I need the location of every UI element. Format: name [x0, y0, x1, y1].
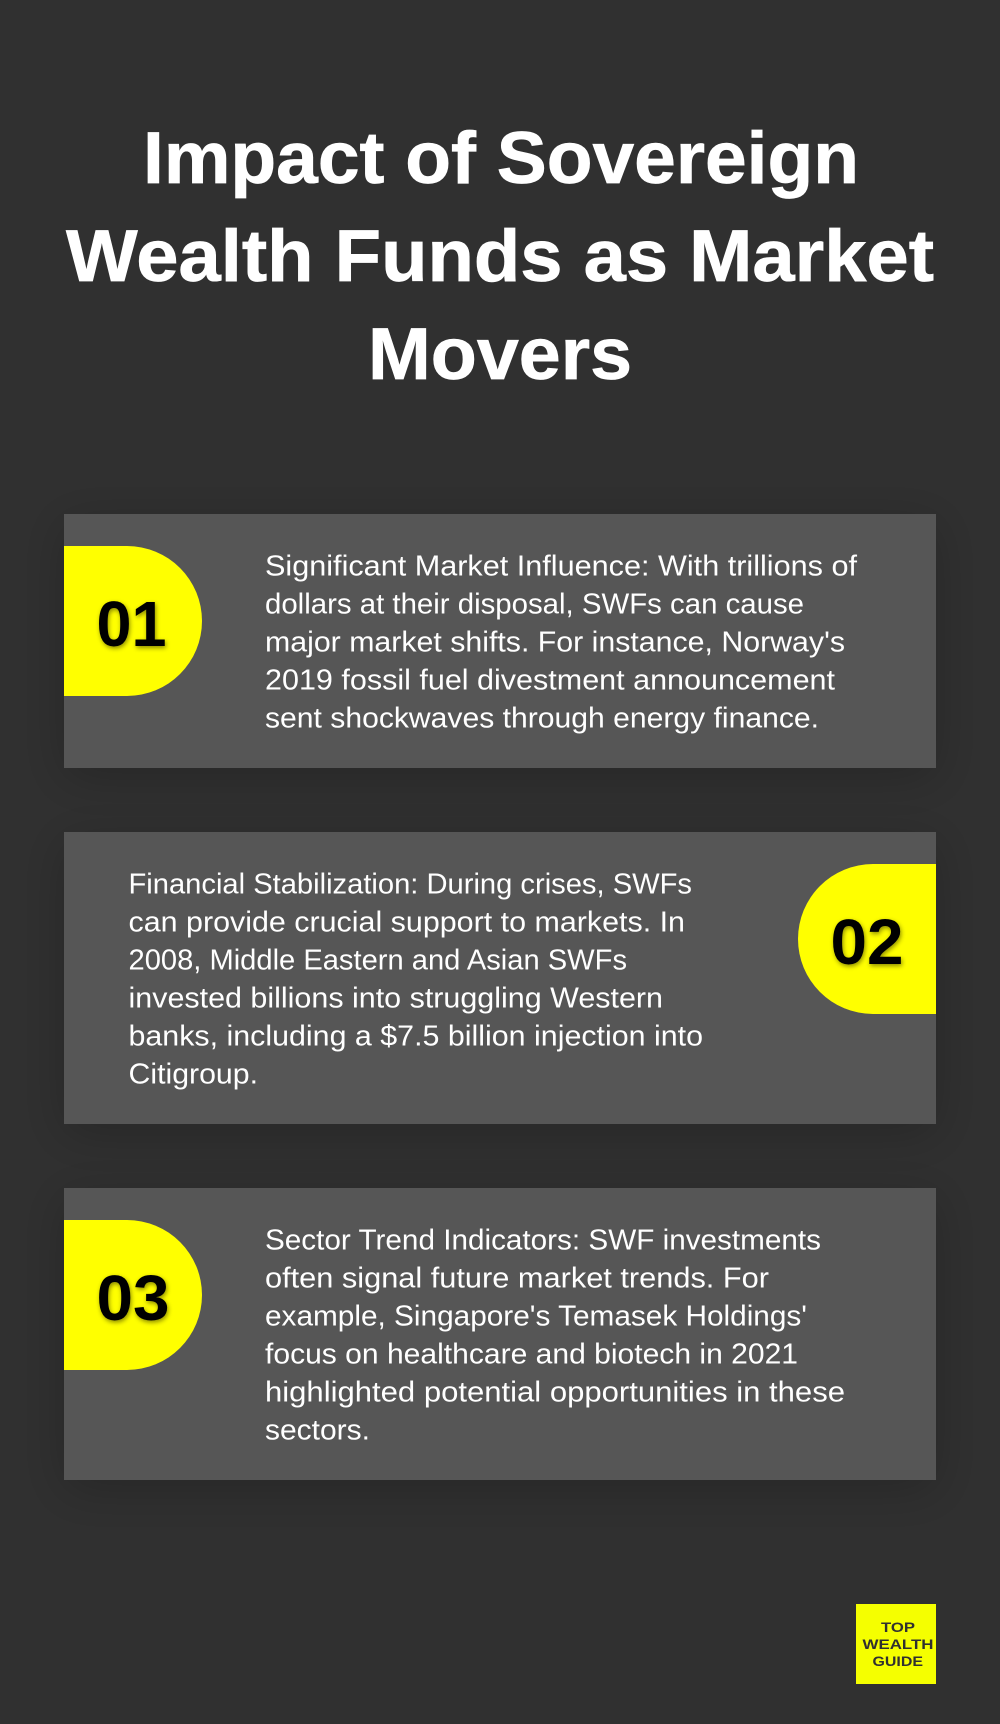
- logo: top wealth guide: GUIDE: [872, 1653, 923, 1669]
- panel 2 text: banks, including a $7.5 billion injection into: [128, 1020, 703, 1052]
- title: Impact of Sovereign: [143, 118, 859, 199]
- panel 1 text: sent shockwaves through energy finance.: [265, 702, 819, 734]
- logo: top wealth guide: WEALTH: [862, 1636, 934, 1652]
- number 01: 01: [96, 588, 166, 660]
- panel 3 text: Sector Trend Indicators: SWF investments: [265, 1224, 821, 1256]
- badge 01: [64, 546, 202, 696]
- badge 02: [798, 864, 936, 1014]
- title: Wealth Funds as Market: [66, 216, 934, 297]
- panel 2 text: [128, 868, 703, 1090]
- panel 2 text: 2008, Middle Eastern and Asian SWFs: [128, 944, 627, 976]
- panel 3 text: sectors.: [265, 1414, 370, 1446]
- logo: top wealth guide: [856, 1604, 936, 1684]
- panel 2 text: Financial Stabilization: During crises, SWFs: [128, 868, 692, 900]
- panel 1 text: [265, 550, 858, 734]
- badge 03: [64, 1220, 202, 1370]
- panel: financial stabilization: [64, 832, 936, 1124]
- title: [66, 118, 934, 395]
- panel 1 text: major market shifts. For instance, Norway's: [265, 626, 845, 658]
- panel 1 text: Significant Market Influence: With trillions of: [265, 550, 858, 582]
- panel: sector trend indicators: [64, 1188, 936, 1480]
- title: Movers: [368, 314, 632, 395]
- logo: top wealth guide: TOP: [881, 1619, 915, 1635]
- panel 3 text: [265, 1224, 845, 1446]
- panel 1 text: dollars at their disposal, SWFs can cause: [265, 588, 804, 620]
- panel 3 text: example, Singapore's Temasek Holdings': [265, 1300, 807, 1332]
- panel 2 text: can provide crucial support to markets. In: [128, 906, 685, 938]
- panel 3 text: highlighted potential opportunities in these: [265, 1376, 845, 1408]
- panel 2 text: invested billions into struggling Western: [128, 982, 663, 1014]
- panel 1 background: [64, 514, 936, 768]
- number 02: 02: [830, 906, 904, 978]
- panel 3 text: often signal future market trends. For: [265, 1262, 769, 1294]
- number 03: 03: [96, 1262, 170, 1334]
- panel 2 text: Citigroup.: [128, 1058, 258, 1090]
- panel 1 text: 2019 fossil fuel divestment announcement: [265, 664, 835, 696]
- panel: significant market influence: [64, 514, 936, 768]
- panel 3 background: [64, 1188, 936, 1480]
- panel 2 background: [64, 832, 936, 1124]
- panel 3 text: focus on healthcare and biotech in 2021: [265, 1338, 798, 1370]
